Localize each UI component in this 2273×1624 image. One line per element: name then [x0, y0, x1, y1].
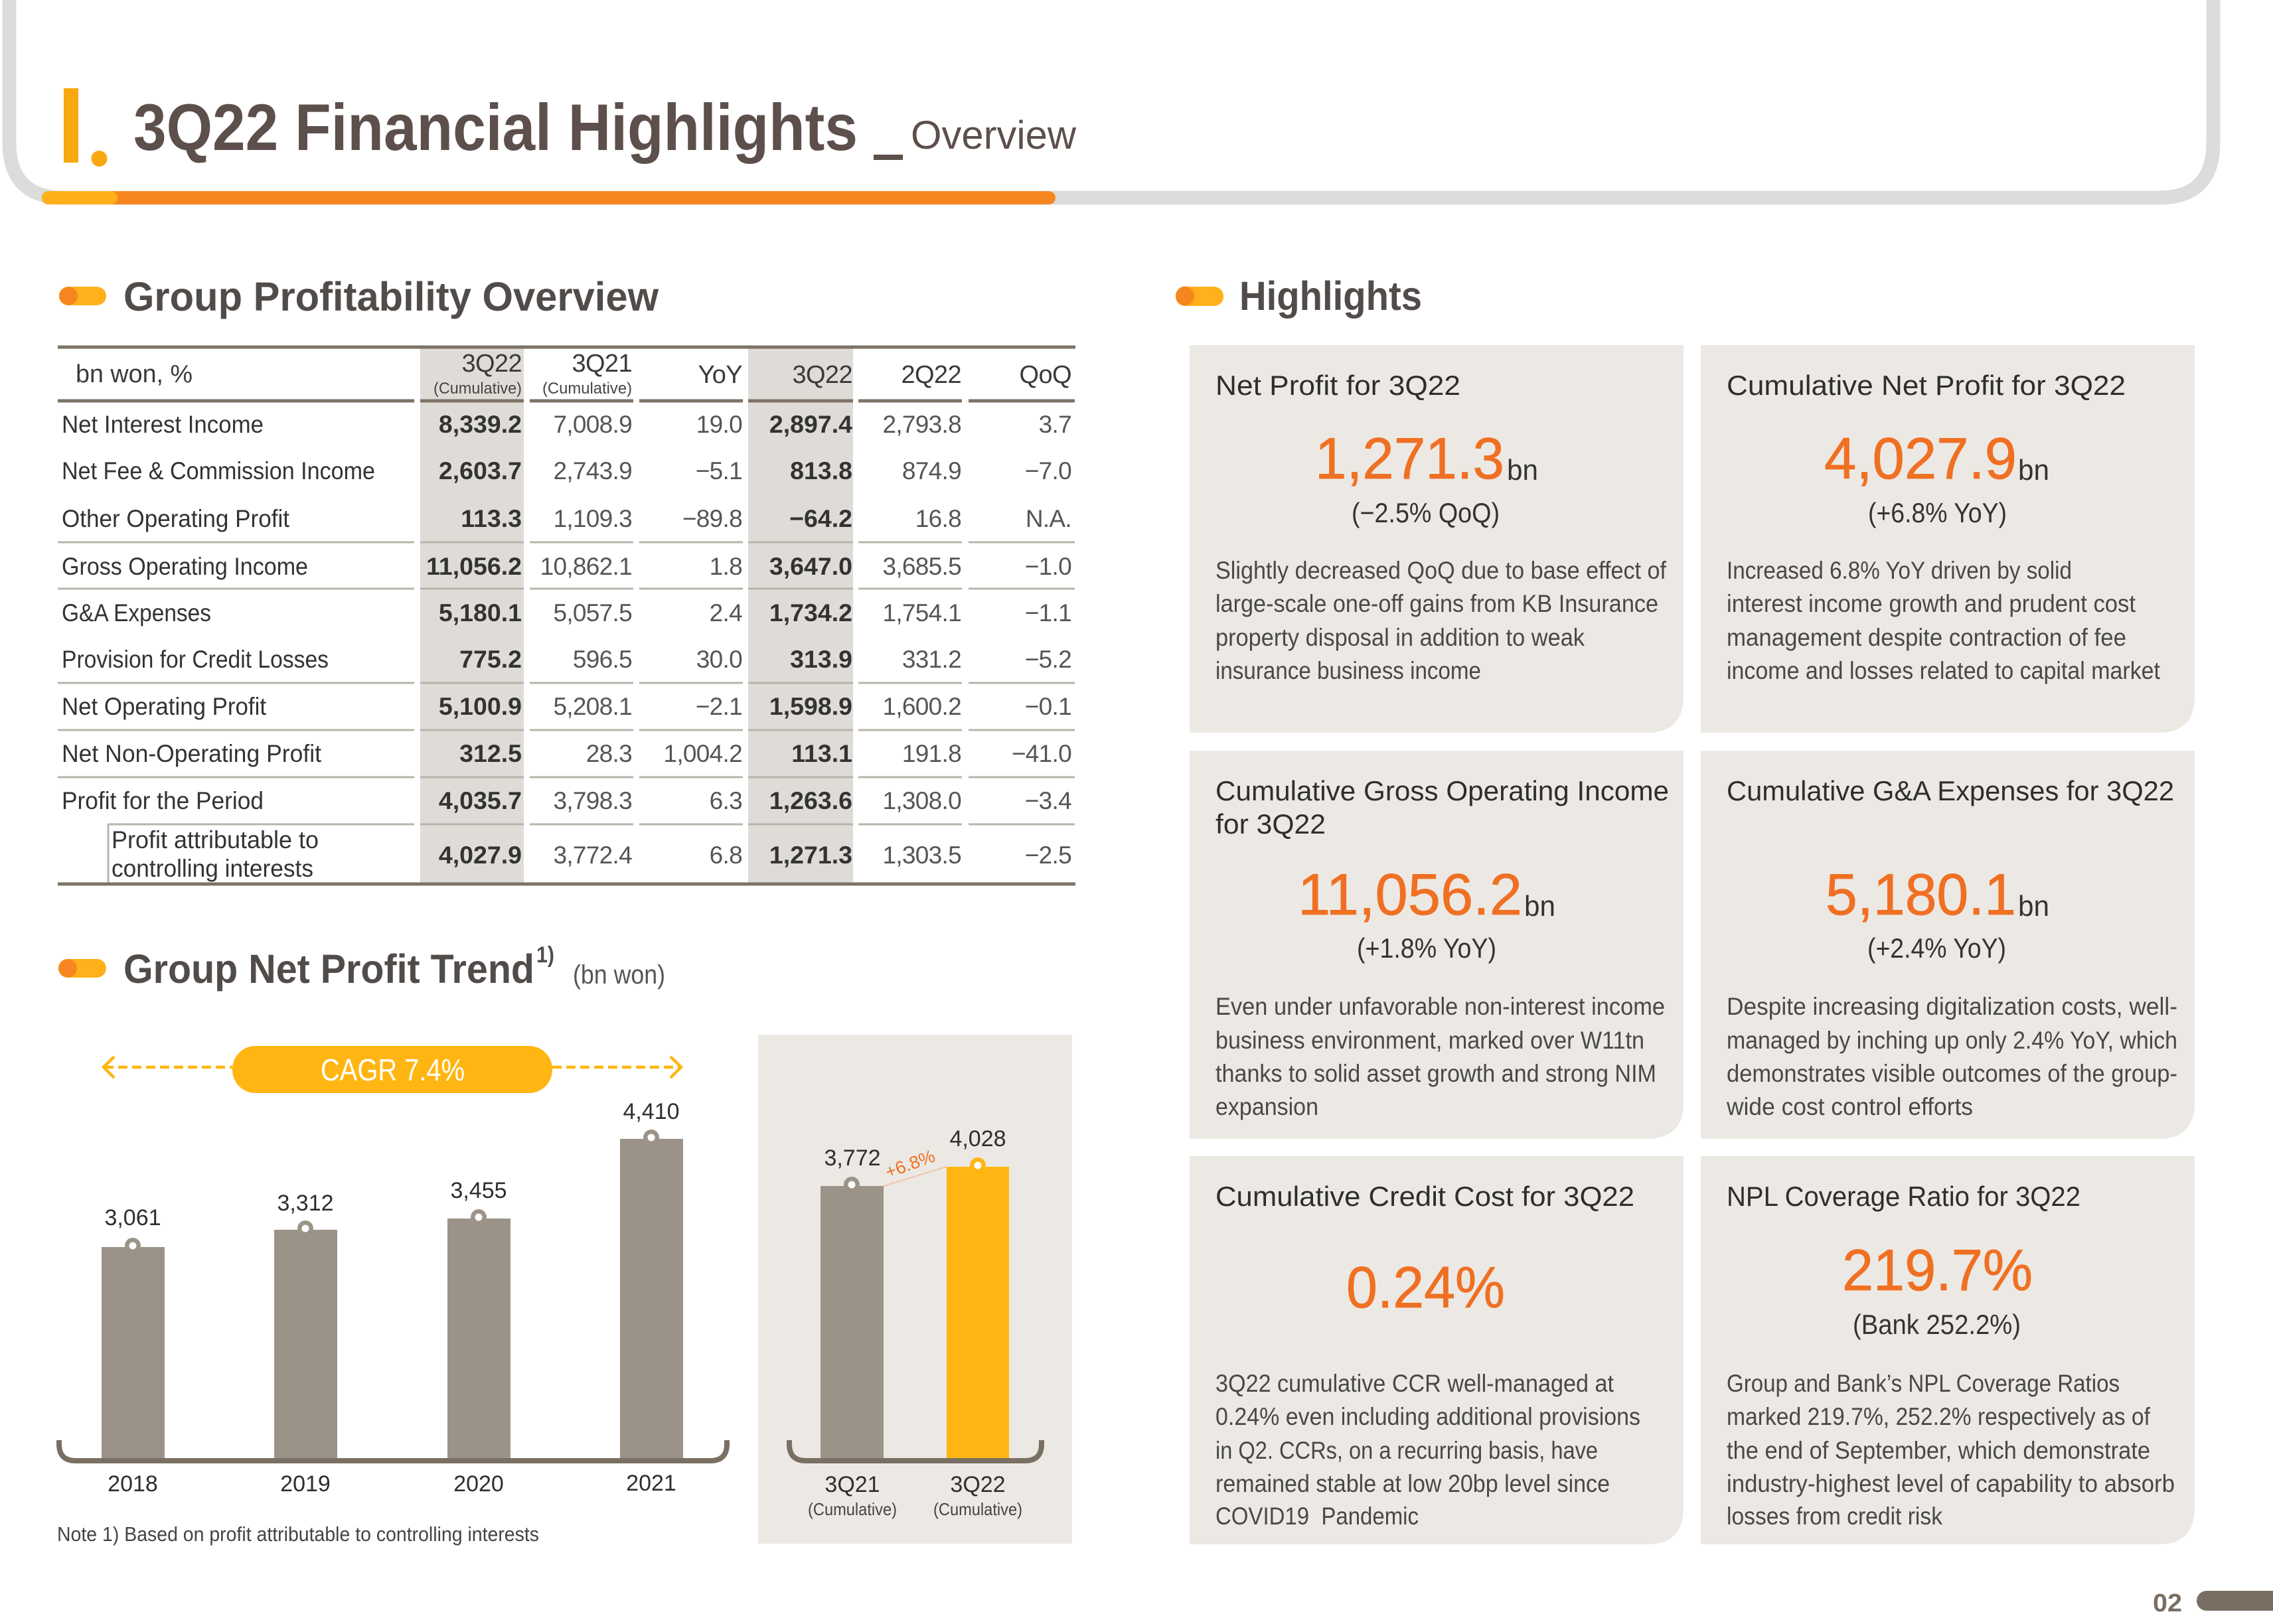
- title: 3Q22 Financial Highlights: [133, 90, 858, 164]
- table header row: (Cumulative): [542, 380, 632, 398]
- bar 2020: 3,455: [450, 1178, 507, 1203]
- card: NPL Coverage Ratio: Group and Bank’s NPL Coverage Ratios: [1727, 1370, 2120, 1397]
- row: Net Fee & Commission Income: Net Fee & Commission Income: [62, 457, 375, 484]
- table header row: QoQ: [1020, 361, 1071, 389]
- bar 3Q21: 3,772: [824, 1145, 881, 1171]
- card: Cumulative Gross Operating Income: thanks to solid asset growth and strong NIM: [1215, 1060, 1656, 1087]
- row: G&A Expenses: 5,057.5: [553, 599, 632, 627]
- row: Other Operating Profit: [62, 504, 1071, 532]
- bar 3Q21: [808, 1145, 897, 1519]
- card: Cumulative G&A Expenses: [1701, 751, 2195, 1139]
- row: Net Interest Income: 8,339.2: [439, 410, 522, 438]
- row: Net Fee & Commission Income: [62, 457, 1071, 484]
- table header row: [76, 350, 1071, 398]
- card: Net Profit for 3Q22: 1,271.3: [1315, 425, 1504, 491]
- row: Net Interest Income: [62, 410, 1071, 438]
- bar 2018: 3,061: [104, 1205, 161, 1230]
- card: Cumulative Credit Cost: remained stable at low 20bp level since: [1215, 1470, 1610, 1497]
- card: Cumulative Credit Cost: 3Q22 cumulative CCR well-managed at: [1215, 1370, 1614, 1397]
- row: Net Interest Income: Net Interest Income: [62, 411, 264, 438]
- row: Profit attributable to controlling interests: 4,027.9: [439, 841, 522, 869]
- card: Net Profit for 3Q22: Net Profit for 3Q22: [1215, 370, 1460, 401]
- card: Cumulative Net Profit for 3Q22: Cumulative Net Profit for 3Q22: [1727, 370, 2126, 401]
- row: Net Non-Operating Profit: 28.3: [586, 740, 632, 767]
- row: G&A Expenses: G&A Expenses: [62, 599, 211, 627]
- card: Cumulative Gross Operating Income: 11,056.2: [1298, 861, 1522, 927]
- table: group profitability: [58, 347, 1075, 884]
- card: Cumulative Net Profit for 3Q22: (+6.8% YoY): [1868, 497, 2007, 528]
- card: Net Profit for 3Q22: large-scale one-off gains from KB Insurance: [1215, 590, 1658, 617]
- row: Provision for Credit Losses: 596.5: [573, 646, 632, 673]
- row: Profit attributable to controlling interests: 1,271.3: [769, 841, 852, 869]
- row: Net Interest Income: 19.0: [696, 411, 742, 438]
- row: Other Operating Profit: 16.8: [915, 505, 961, 532]
- table header row: YoY: [698, 361, 742, 389]
- bar 3Q22: (Cumulative): [933, 1499, 1022, 1519]
- card: NPL Coverage Ratio: the end of September, which demonstrate: [1727, 1437, 2150, 1464]
- row: Net Fee & Commission Income: 874.9: [902, 457, 961, 484]
- card: Cumulative Credit Cost: 0.24% even including additional provisions: [1215, 1403, 1640, 1430]
- row: Profit attributable to controlling interests: 1,303.5: [882, 842, 961, 869]
- card: Cumulative Net Profit for 3Q22: [1701, 345, 2195, 733]
- bar chart: annual net profit: [59, 1046, 727, 1497]
- CAGR pill and arrow: [104, 1046, 681, 1093]
- card: Cumulative Gross Operating Income: Cumulative Gross Operating Income: [1215, 775, 1669, 806]
- card: Cumulative Gross Operating Income: [1190, 751, 1684, 1139]
- row: Net Fee & Commission Income: 2,743.9: [553, 457, 632, 484]
- row: Gross Operating Income: Gross Operating Income: [62, 553, 308, 580]
- bar 2018: 2018: [108, 1471, 158, 1497]
- card: Net Profit for 3Q22: Slightly decreased QoQ due to base effect of: [1215, 557, 1667, 584]
- row: Net Operating Profit: −0.1: [1025, 693, 1071, 720]
- row: Profit for the Period: 3,798.3: [553, 787, 632, 814]
- chart baseline: [789, 1440, 1042, 1461]
- row: Provision for Credit Losses: [62, 645, 1071, 673]
- card: Cumulative G&A Expenses: demonstrates visible outcomes of the group-: [1727, 1060, 2177, 1087]
- row: Other Operating Profit: N.A.: [1026, 505, 1071, 532]
- row: Net Operating Profit: 5,208.1: [553, 693, 632, 720]
- card: Cumulative G&A Expenses: wide cost control efforts: [1726, 1093, 1973, 1120]
- card: Cumulative Credit Cost: COVID19 Pandemic: [1215, 1503, 1419, 1530]
- card: NPL Coverage Ratio: marked 219.7%, 252.2% respectively as of: [1727, 1403, 2151, 1430]
- row: Profit for the Period: Profit for the Period: [62, 787, 264, 814]
- card: Cumulative Net Profit for 3Q22: management despite contraction of fee: [1727, 624, 2126, 651]
- row: Profit attributable to controlling interests: −2.5: [1025, 842, 1071, 869]
- heading: Group Net Profit Trend: 1): [536, 942, 554, 968]
- row: Net Non-Operating Profit: 312.5: [459, 739, 522, 767]
- bar 3Q21: 3Q21: [824, 1472, 880, 1497]
- row: Provision for Credit Losses: Provision for Credit Losses: [62, 646, 329, 673]
- row: Gross Operating Income: 3,685.5: [882, 553, 961, 580]
- row: Net Operating Profit: 5,100.9: [439, 692, 522, 720]
- bar 3Q21: (Cumulative): [808, 1499, 897, 1519]
- page number: [2153, 1589, 2273, 1617]
- card: Cumulative Gross Operating Income: business environment, marked over W11tn: [1215, 1027, 1644, 1054]
- card: Net Profit for 3Q22: property disposal in addition to weak: [1215, 624, 1585, 651]
- row: Profit for the Period: [62, 786, 1071, 814]
- card: Cumulative Gross Operating Income: bn: [1524, 890, 1555, 923]
- card: NPL Coverage Ratio: NPL Coverage Ratio for 3Q22: [1727, 1181, 2080, 1212]
- row: Gross Operating Income: −1.0: [1025, 553, 1071, 580]
- table header row: 2Q22: [901, 361, 961, 389]
- row: Profit for the Period: 6.3: [710, 787, 742, 814]
- row: Provision for Credit Losses: 775.2: [459, 645, 522, 673]
- row: Other Operating Profit: −64.2: [789, 504, 852, 532]
- card: Cumulative G&A Expenses: Despite increasing digitalization costs, well-: [1727, 993, 2177, 1020]
- row: Net Fee & Commission Income: −7.0: [1025, 457, 1071, 484]
- row: Net Non-Operating Profit: 191.8: [902, 740, 961, 767]
- card: Net Profit for 3Q22: [1190, 345, 1684, 733]
- row: Gross Operating Income: 10,862.1: [540, 553, 632, 580]
- row: Profit attributable to controlling interests: 6.8: [710, 842, 742, 869]
- row: G&A Expenses: 1,734.2: [769, 599, 852, 627]
- card: NPL Coverage Ratio: industry-highest level of capability to absorb: [1727, 1470, 2175, 1497]
- row: Net Fee & Commission Income: 813.8: [790, 457, 852, 484]
- card: Cumulative Credit Cost: 0.24%: [1346, 1254, 1505, 1320]
- card: Cumulative Net Profit for 3Q22: Increased 6.8% YoY driven by solid: [1727, 557, 2072, 584]
- card: Net Profit for 3Q22: insurance business income: [1215, 657, 1481, 684]
- card: Net Profit for 3Q22: (−2.5% QoQ): [1352, 497, 1500, 528]
- row: Profit attributable to controlling interests: [112, 826, 1071, 882]
- bar 2019: 2019: [280, 1471, 331, 1497]
- heading: Group Profitability Overview: Group Profitability Overview: [123, 274, 659, 319]
- table header row: (Cumulative): [433, 380, 522, 398]
- CAGR pill and arrow: CAGR 7.4%: [321, 1053, 465, 1087]
- row: Net Non-Operating Profit: 113.1: [791, 739, 852, 767]
- heading: Group Net Profit Trend: (bn won): [573, 960, 665, 990]
- heading: Group Net Profit Trend: Group Net Profit Trend: [123, 946, 534, 992]
- row: Net Non-Operating Profit: −41.0: [1012, 740, 1071, 767]
- row: Net Operating Profit: Net Operating Profit: [62, 693, 267, 720]
- row: Net Interest Income: 2,897.4: [769, 410, 852, 438]
- row: G&A Expenses: 5,180.1: [439, 599, 522, 627]
- heading: Highlights: Highlights: [1239, 273, 1422, 319]
- card: NPL Coverage Ratio: 219.7%: [1842, 1237, 2033, 1303]
- row: Gross Operating Income: 11,056.2: [426, 552, 522, 580]
- bar 2021: 4,410: [623, 1099, 680, 1124]
- card: Net Profit for 3Q22: bn: [1507, 454, 1538, 486]
- row: Gross Operating Income: 3,647.0: [769, 552, 852, 580]
- card: Cumulative G&A Expenses: 5,180.1: [1826, 861, 2016, 927]
- row: Profit attributable to controlling interests: controlling interests: [112, 855, 313, 882]
- bar 2020: [447, 1178, 510, 1497]
- row: Net Interest Income: 2,793.8: [882, 411, 961, 438]
- row: Net Interest Income: 3.7: [1039, 411, 1071, 438]
- card: Cumulative G&A Expenses: Cumulative G&A Expenses for 3Q22: [1727, 775, 2174, 806]
- row: Profit for the Period: −3.4: [1025, 787, 1071, 814]
- bar 2019: 3,312: [277, 1191, 334, 1216]
- row: G&A Expenses: 1,754.1: [882, 599, 961, 627]
- row: Other Operating Profit: 113.3: [461, 504, 522, 532]
- card: NPL Coverage Ratio: [1701, 1156, 2195, 1544]
- panel: cumulative comparison chart: [758, 1035, 1072, 1544]
- growth callout: +6.8%: [883, 1146, 937, 1182]
- heading: Highlights: [1176, 273, 1422, 319]
- row: Profit for the Period: 1,263.6: [769, 786, 852, 814]
- row: Net Fee & Commission Income: 2,603.7: [439, 457, 522, 484]
- row: Net Non-Operating Profit: [62, 739, 1071, 767]
- card: Cumulative Credit Cost: in Q2. CCRs, on a recurring basis, have: [1215, 1437, 1598, 1464]
- card: Cumulative G&A Expenses: (+2.4% YoY): [1867, 932, 2006, 964]
- card: Cumulative Credit Cost: [1190, 1156, 1684, 1544]
- card: Cumulative Net Profit for 3Q22: income and losses related to capital market: [1727, 657, 2161, 684]
- row: Provision for Credit Losses: −5.2: [1025, 646, 1071, 673]
- card: Cumulative G&A Expenses: bn: [2018, 890, 2049, 923]
- row: Net Operating Profit: 1,600.2: [882, 693, 961, 720]
- row: Net Interest Income: 7,008.9: [553, 411, 632, 438]
- card: Cumulative Credit Cost: Cumulative Credit Cost for 3Q22: [1215, 1181, 1634, 1212]
- row: Net Operating Profit: −2.1: [696, 693, 742, 720]
- bar 2019: [274, 1191, 337, 1497]
- card: Cumulative Gross Operating Income: (+1.8% YoY): [1357, 932, 1496, 964]
- row: Profit attributable to controlling interests: 3,772.4: [553, 842, 632, 869]
- row: Provision for Credit Losses: 313.9: [790, 645, 852, 673]
- page number: 02: [2153, 1589, 2182, 1617]
- row: Provision for Credit Losses: 30.0: [696, 646, 742, 673]
- chart baseline: [59, 1440, 727, 1461]
- card: Cumulative Gross Operating Income: for 3Q22: [1215, 808, 1326, 840]
- row: Other Operating Profit: −89.8: [682, 505, 742, 532]
- bar 3Q22: 4,028: [949, 1126, 1006, 1151]
- bar 2021: 2021: [626, 1471, 676, 1496]
- table header row: bn won, %: [76, 360, 193, 388]
- row: Net Non-Operating Profit: Net Non-Operating Profit: [62, 740, 322, 767]
- row: Net Operating Profit: [62, 692, 1071, 720]
- bar 3Q22: 3Q22: [950, 1472, 1006, 1497]
- heading: Group Net Profit Trend: [58, 942, 665, 992]
- row: Other Operating Profit: Other Operating Profit: [62, 505, 290, 532]
- card: Cumulative G&A Expenses: managed by inching up only 2.4% YoY, which: [1727, 1027, 2177, 1054]
- section numeral mark: [64, 88, 108, 167]
- row: Profit attributable to controlling interests: Profit attributable to: [112, 826, 319, 853]
- header frame: [9, 0, 2213, 204]
- bar 2018: [102, 1205, 165, 1497]
- card: Cumulative Net Profit for 3Q22: 4,027.9: [1824, 425, 2017, 491]
- card: Cumulative Gross Operating Income: Even under unfavorable non-interest income: [1215, 993, 1665, 1020]
- card: NPL Coverage Ratio: (Bank 252.2%): [1853, 1309, 2021, 1340]
- card: NPL Coverage Ratio: losses from credit risk: [1727, 1503, 1942, 1530]
- row: Gross Operating Income: [62, 552, 1071, 580]
- bar 2020: 2020: [453, 1471, 504, 1497]
- row: Profit for the Period: 1,308.0: [882, 787, 961, 814]
- row: G&A Expenses: −1.1: [1025, 599, 1071, 627]
- row: G&A Expenses: [62, 599, 1071, 627]
- bar 3Q22: [933, 1126, 1022, 1519]
- row: Net Operating Profit: 1,598.9: [769, 692, 852, 720]
- card: Cumulative Net Profit for 3Q22: bn: [2018, 454, 2049, 486]
- row: Other Operating Profit: 1,109.3: [553, 505, 632, 532]
- row: Profit for the Period: 4,035.7: [439, 786, 522, 814]
- card: Cumulative Gross Operating Income: expansion: [1215, 1093, 1318, 1120]
- table header row: 3Q22: [461, 350, 522, 378]
- table header row: 3Q22: [792, 361, 852, 389]
- row: Net Non-Operating Profit: 1,004.2: [663, 740, 742, 767]
- title: Overview: [911, 113, 1077, 157]
- card: Cumulative Net Profit for 3Q22: interest income growth and prudent cost: [1727, 590, 2136, 617]
- note: Note 1) Based on profit attributable to controlling interests: [57, 1522, 539, 1546]
- row: Provision for Credit Losses: 331.2: [902, 646, 961, 673]
- row: Net Fee & Commission Income: −5.1: [696, 457, 742, 484]
- progress bar: [42, 191, 1056, 204]
- row: Gross Operating Income: 1.8: [710, 553, 742, 580]
- bar 2021: [620, 1099, 683, 1496]
- table header row: 3Q21: [572, 350, 632, 378]
- row: G&A Expenses: 2.4: [710, 599, 742, 627]
